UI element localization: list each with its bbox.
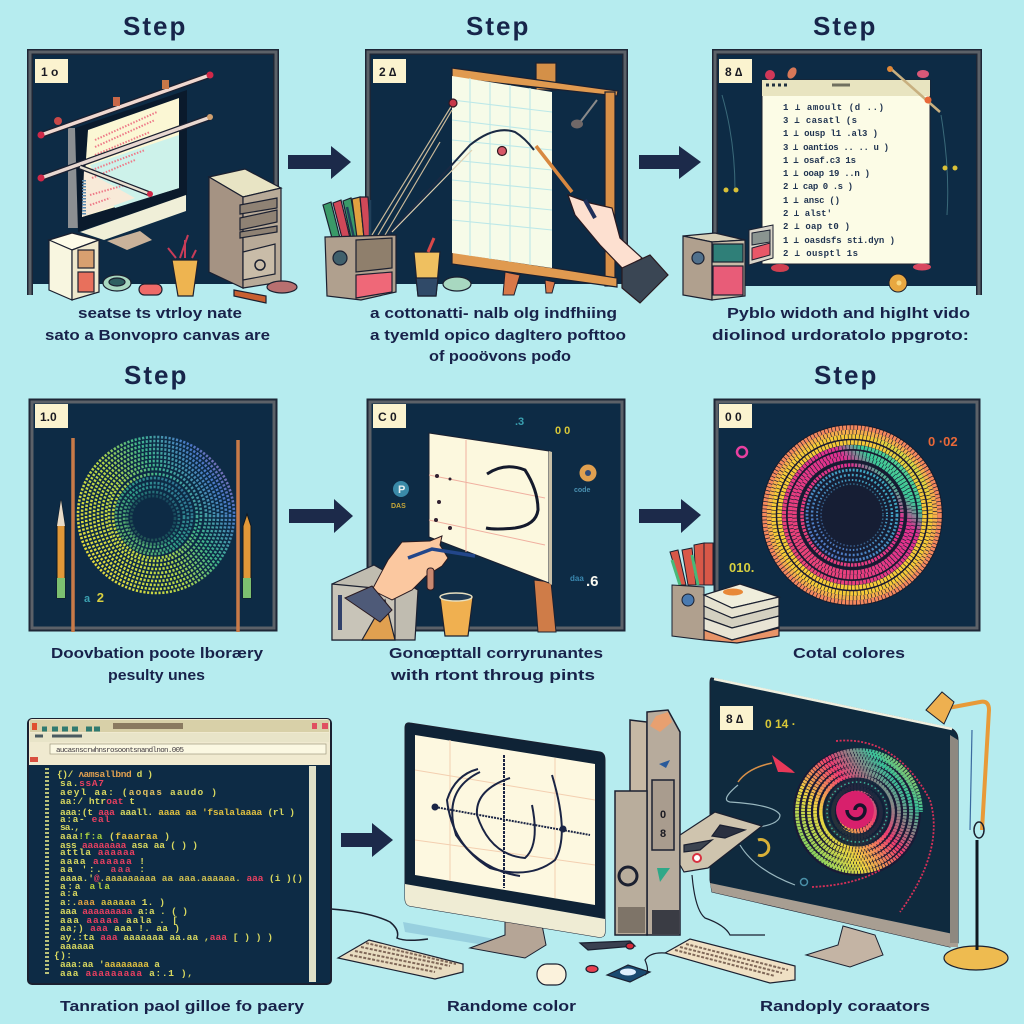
code lines: a:.aaa aaaaaa 1. ) xyxy=(60,897,165,908)
code lines: sa., xyxy=(60,822,80,833)
number tag xyxy=(720,706,753,730)
pen holder xyxy=(670,543,713,640)
strings and curve xyxy=(372,99,534,235)
desk accessories xyxy=(537,875,795,985)
panel: step 3 code document xyxy=(683,52,979,300)
caption: step 4: pesulty unes xyxy=(108,667,205,684)
number tag xyxy=(35,59,68,83)
number tag xyxy=(719,404,752,428)
code lines: aaaa aaaaaa ! xyxy=(60,856,145,867)
small value label: a 2 xyxy=(84,590,104,605)
code lines xyxy=(54,769,303,979)
number tag: 8 ∆ xyxy=(725,65,743,79)
tower computer xyxy=(615,710,680,935)
line gutter xyxy=(45,768,49,976)
coloured labels: .3 xyxy=(515,416,524,428)
code lines: 1 ⊥ ooap 19 ..n ) xyxy=(783,169,870,179)
ring value labels: 0 ·02 xyxy=(928,434,958,449)
panel: step 2 easel xyxy=(323,52,668,303)
ring marker xyxy=(758,840,769,856)
code lines: a:a- eal xyxy=(60,814,110,825)
caption: step 5 xyxy=(389,645,603,684)
number tag: 0 0 xyxy=(725,410,742,424)
corner label: 0 14 · xyxy=(765,717,796,731)
caption: step 2 xyxy=(370,305,626,365)
right pencil xyxy=(243,514,251,598)
heading: step row 1 middle: Step xyxy=(466,11,530,41)
coloured labels: DAS xyxy=(391,503,406,510)
tower computer: 8 xyxy=(660,828,666,840)
code lines: 2 ⊥ cap 0 .s ) xyxy=(783,182,853,192)
code lines: 3 ⊥ casatl (s xyxy=(783,116,857,126)
code lines: 3 ⊥ oantios .. .. u ) xyxy=(783,143,889,153)
code lines: 2 ⊥ ousptl 1s xyxy=(783,249,858,259)
gold dots xyxy=(724,166,958,192)
chin xyxy=(710,883,958,947)
small book xyxy=(749,225,773,265)
panel: code editor window xyxy=(28,719,331,984)
left pencil xyxy=(57,500,65,598)
heading: step row 1 right: Step xyxy=(813,11,877,41)
desk items xyxy=(103,235,297,303)
hand with brush xyxy=(536,146,668,303)
code lines: aaaa.'@.aaaaaaaaa aa aaa.aaaaaa. aaa (i )() xyxy=(60,873,303,884)
caption: step 2: of pooövons pođo xyxy=(429,348,571,365)
code lines: aa;) aaa aaa !. aa ) xyxy=(60,923,180,934)
ring value labels xyxy=(729,434,958,575)
pointer arrow xyxy=(738,755,795,782)
smartphone xyxy=(607,965,650,982)
stand xyxy=(470,920,546,958)
coloured labels: daa xyxy=(570,574,584,583)
stand xyxy=(806,926,883,967)
caption: step 3 xyxy=(712,305,970,344)
number tag xyxy=(35,404,68,428)
caption: step 1: seatse ts vtrloy nate xyxy=(78,305,242,322)
code lines: attla aaaaaa xyxy=(60,847,135,858)
axes and circles xyxy=(432,755,590,888)
code lines: 2 ⊥ alst' xyxy=(783,209,832,219)
tower computer: 0 xyxy=(660,809,666,821)
heading: step row 2 right: Step xyxy=(814,360,878,390)
scanner device xyxy=(680,812,762,872)
tower computer xyxy=(209,169,281,288)
monitor xyxy=(68,90,187,250)
number tag: 1 o xyxy=(41,65,58,79)
keyboard right xyxy=(665,939,795,983)
monitor shadow xyxy=(403,922,500,946)
caption: code window: Tanration paol gilloe fo paery xyxy=(60,998,305,1015)
window toolbar xyxy=(29,719,330,765)
number tag: C 0 xyxy=(378,410,397,424)
caption: step 2: a cottonatti- nalb olg indfhiing xyxy=(370,305,617,322)
arrow 4 to 5 xyxy=(289,499,353,533)
arrow 2 to 3 xyxy=(639,146,701,179)
caption: random coordinators: Randoply coraators xyxy=(760,998,930,1015)
code lines: 1 ⊥ amoult (d ..) xyxy=(783,103,884,113)
panel: step 4 dotted circle xyxy=(30,400,276,632)
caption: step 4: Doovbation poote lboræry xyxy=(51,645,264,662)
code lines: 1 ⊥ ousp l1 .al3 ) xyxy=(783,129,878,139)
chin xyxy=(405,884,605,937)
arrow 5 to 6 xyxy=(639,499,701,533)
pen holder xyxy=(323,197,396,300)
code lines: aaa!f:a (faaaraa ) xyxy=(60,831,170,842)
bezel xyxy=(710,678,958,947)
code lines: 1 ⊥ oasdsfs sti.dyn ) xyxy=(783,236,895,246)
red pill xyxy=(586,966,598,972)
number tag: 1.0 xyxy=(40,410,57,424)
decorative wires xyxy=(722,95,948,215)
caption: step 6: Cotal colores xyxy=(793,645,905,662)
heading: step row 1 left: Step xyxy=(123,11,187,41)
arrow 7 to 8 xyxy=(341,823,393,857)
coloured labels: P xyxy=(398,484,405,496)
stacked books xyxy=(704,584,779,643)
code lines: aaa:aa 'aaaaaaaa a xyxy=(60,959,160,970)
coloured labels: .6 xyxy=(586,573,599,590)
caption: step 3: Pyblo widoth and higlht vido xyxy=(727,305,970,322)
box with panels xyxy=(683,233,745,300)
box xyxy=(332,565,418,640)
number tag xyxy=(373,404,406,428)
code lines: aaa aaaaaaaaa a:.1 ), xyxy=(60,968,193,979)
number tag: 2 ∆ xyxy=(379,65,397,79)
code lines: aaa aaaaa aala . [ xyxy=(60,915,178,926)
code lines: ass aaaaaaaa asa aa ( ) ) xyxy=(60,840,198,851)
outer dotted arc xyxy=(812,740,934,912)
code lines: a:a xyxy=(60,888,78,899)
panel: step 1 monitor and tower xyxy=(30,52,297,303)
scrollbar xyxy=(309,766,316,982)
caption: step 5: Gonœpttall corryrunantes xyxy=(389,645,603,662)
arrow 1 to 2 xyxy=(288,146,351,179)
panel: step 5 coordinates canvas xyxy=(332,400,624,640)
brush and pink clips xyxy=(765,66,940,272)
orange cup xyxy=(440,593,473,636)
code lines: 2 ⊥ oap t0 ) xyxy=(783,222,850,232)
number tag xyxy=(373,59,406,83)
screen bezel xyxy=(405,723,605,937)
code lines: sa.ssA7 xyxy=(60,778,104,789)
easel and grid canvas xyxy=(452,63,618,295)
caption: random color: Randome color xyxy=(447,998,576,1015)
caption: step 1: sato a Bonvopro canvas are xyxy=(45,327,270,344)
code lines xyxy=(783,103,895,259)
code lines: aeyl aa: (aoqas aaudo ) xyxy=(60,787,217,798)
easel leg xyxy=(534,580,556,632)
code lines: {)/ ᴧamsallbnd d ) xyxy=(57,769,153,780)
looping wire xyxy=(726,785,795,885)
hanging tool xyxy=(571,100,597,128)
screen xyxy=(415,735,595,905)
caption: step 1 xyxy=(45,305,270,344)
code lines: aaa aaaaaaaaa a:a . ( ) xyxy=(60,906,188,917)
caption: step 3: diolinod urdoratolo ppgroto: xyxy=(712,327,969,344)
hand with pen xyxy=(345,536,475,622)
number tag xyxy=(719,59,752,83)
code document xyxy=(762,80,930,264)
window toolbar: aucasnscrwhnsrosoontsnandlnon.005 xyxy=(56,747,184,755)
large monitor with spiral xyxy=(710,678,958,967)
code lines: 1 ⊥ osaf.c3 1s xyxy=(783,156,856,166)
code lines: aa ':. aaa : xyxy=(60,864,145,875)
monitor with axes xyxy=(403,723,605,958)
ring value labels: 010. xyxy=(729,560,754,575)
code lines: aaa:(t aaa aaall. aaaa aa 'fsalalaaaa (rl ) xyxy=(60,807,295,818)
number tag: 8 ∆ xyxy=(726,712,744,726)
cable and keyboard left xyxy=(331,909,463,979)
code lines: aaaaaa xyxy=(60,941,94,952)
dotted circle xyxy=(78,437,234,593)
pencils xyxy=(38,72,214,197)
coloured labels: 0 0 xyxy=(555,425,570,437)
caption: step 2: a tyemld opico dagltero pofttoo xyxy=(370,327,626,344)
concentric colored rings xyxy=(762,425,942,605)
coloured labels xyxy=(391,416,599,590)
spiral xyxy=(793,748,921,876)
orb xyxy=(889,274,907,292)
canvas with curve xyxy=(429,433,552,585)
coloured labels: code xyxy=(574,487,590,494)
panel: step 6 colored rings xyxy=(670,400,979,643)
code lines: {): xyxy=(54,950,72,961)
code lines: a:a ala xyxy=(60,881,110,892)
code lines: aa:/ htroat t xyxy=(60,796,135,807)
mouse xyxy=(537,964,566,985)
rods xyxy=(73,438,238,632)
caption: step 4 xyxy=(51,645,264,684)
cup and lens xyxy=(414,238,471,296)
code lines: ay.:ta aaa aaaaaaa aa.aa ,aaa [ ) ) ) xyxy=(60,932,273,943)
code lines: 1 ⊥ ansc () xyxy=(783,196,840,206)
blue dot xyxy=(800,878,808,886)
small box with hearts xyxy=(49,233,99,300)
red ring clip xyxy=(580,941,635,950)
heading: step row 2 left: Step xyxy=(124,360,188,390)
cables xyxy=(645,875,765,975)
floor lamp xyxy=(926,692,1008,970)
caption: step 5: with rtont throug pints xyxy=(390,667,595,684)
